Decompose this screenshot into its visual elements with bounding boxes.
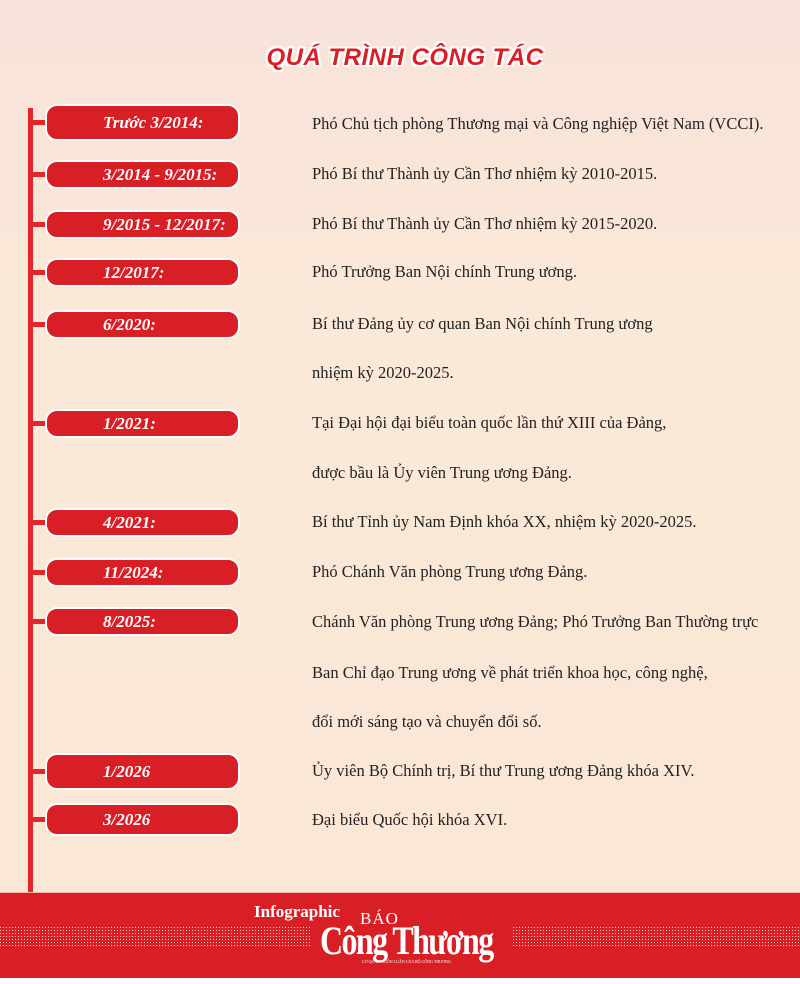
text: 8/2025:: [103, 612, 156, 630]
text: Phó Chủ tịch phòng Thương mại và Công nghiệp Việt Nam (VCCI).: [312, 114, 763, 133]
text: Phó Bí thư Thành ủy Cần Thơ nhiệm kỳ 2010-2015.: [312, 164, 657, 183]
text: đổi mới sáng tạo và chuyển đổi số.: [312, 712, 542, 731]
entry 4: [33, 258, 577, 287]
entry 11: [33, 803, 507, 836]
text: Trước 3/2014:: [103, 112, 203, 132]
text: 3/2014 - 9/2015:: [103, 164, 217, 184]
text: được bầu là Ủy viên Trung ương Đảng.: [312, 463, 572, 482]
logo: [312, 899, 512, 969]
footer: Infographic: [254, 902, 340, 921]
title: QUÁ TRÌNH CÔNG TÁC: [266, 44, 543, 71]
text: Chánh Văn phòng Trung ương Đảng; Phó Trưởng Ban Thường trực: [312, 612, 758, 631]
text: 12/2017:: [103, 262, 164, 282]
text: 1/2026: [103, 762, 150, 780]
text: 6/2020:: [103, 314, 156, 334]
footer: [0, 892, 800, 979]
text: Phó Trưởng Ban Nội chính Trung ương.: [312, 262, 577, 281]
entry 1: [33, 104, 763, 141]
text: Phó Chánh Văn phòng Trung ương Đảng.: [312, 562, 587, 581]
text: 1/2021:: [103, 414, 156, 432]
text: Bí thư Đảng ủy cơ quan Ban Nội chính Trung ương: [312, 314, 653, 333]
logo: CƠ QUAN NGÔN LUẬN CỦA BỘ CÔNG THƯƠNG: [362, 959, 451, 964]
entry 8: [33, 558, 587, 587]
entry 7: [33, 508, 696, 537]
entry 3: [33, 210, 657, 239]
text: Phó Bí thư Thành ủy Cần Thơ nhiệm kỳ 2015-2020.: [312, 214, 657, 233]
entry 2: [33, 160, 657, 189]
text: 9/2015 - 12/2017:: [103, 214, 226, 234]
text: Tại Đại hội đại biểu toàn quốc lần thứ XIII của Đảng,: [312, 413, 666, 432]
text: Bí thư Tỉnh ủy Nam Định khóa XX, nhiệm kỳ 2020-2025.: [312, 512, 696, 531]
text: Ban Chỉ đạo Trung ương về phát triển khoa học, công nghệ,: [312, 663, 708, 682]
entry 6: [33, 409, 666, 482]
entry 5: [33, 310, 653, 382]
text: 3/2026: [103, 810, 150, 828]
text: Ủy viên Bộ Chính trị, Bí thư Trung ương Đảng khóa XIV.: [312, 761, 694, 780]
text: 4/2021:: [103, 512, 156, 532]
timeline axis: [28, 108, 33, 894]
logo: BÁO: [360, 909, 399, 928]
entry 10: [33, 753, 694, 790]
text: 11/2024:: [103, 562, 163, 582]
text: nhiệm kỳ 2020-2025.: [312, 363, 454, 382]
text: Đại biểu Quốc hội khóa XVI.: [312, 810, 507, 829]
entry 9: [33, 607, 758, 731]
logo: Công Thương: [320, 918, 493, 963]
